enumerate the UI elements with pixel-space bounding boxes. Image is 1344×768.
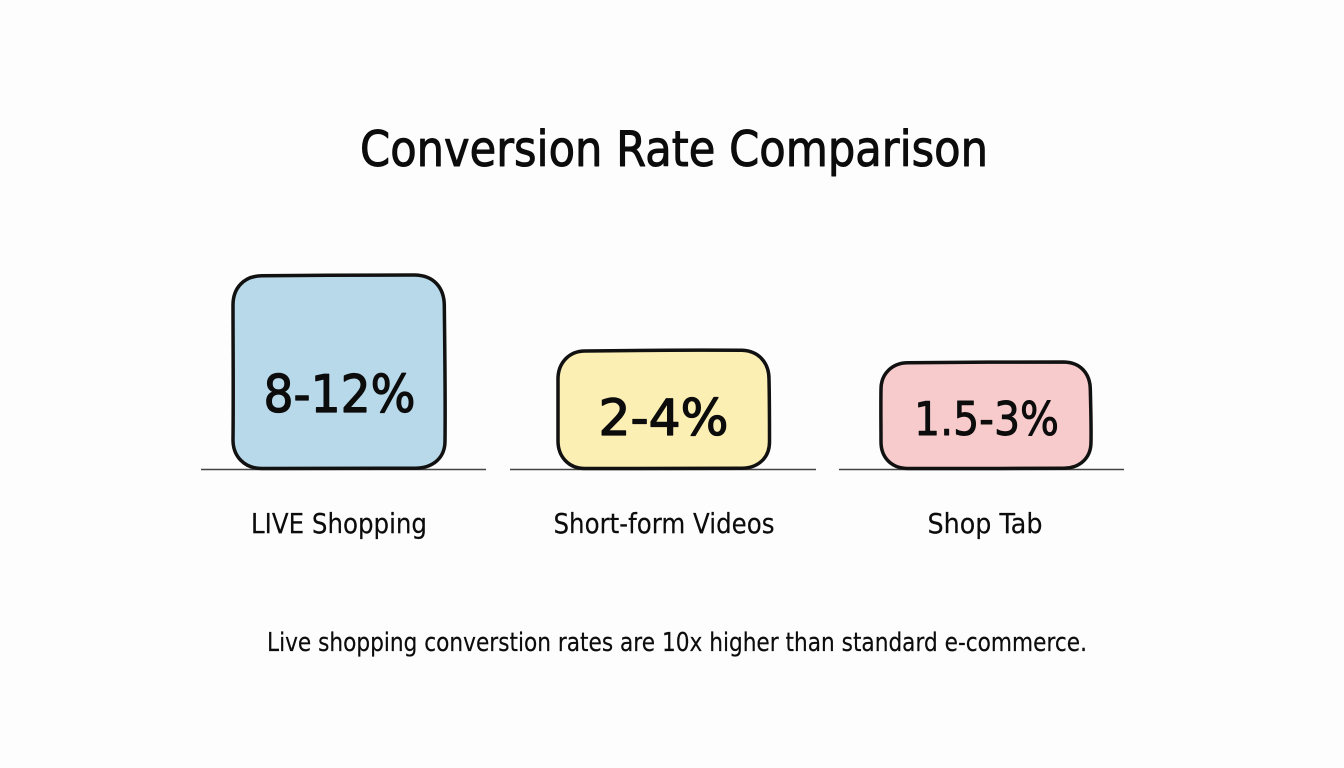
label: LIVE Shopping: LIVE Shopping: [251, 507, 427, 540]
bar group: LIVE Shopping: [201, 275, 486, 540]
bar: Short-form Videos: [558, 350, 770, 468]
label: Short-form Videos: Short-form Videos: [554, 507, 774, 540]
bar group: Short-form Videos: [510, 350, 816, 540]
bar: LIVE Shopping: [233, 275, 445, 468]
label: Shop Tab: Shop Tab: [928, 507, 1042, 540]
bar group: Shop Tab: [839, 362, 1124, 540]
value: 8-12%: 8-12%: [264, 365, 416, 425]
footnote: Live shopping converstion rates are 10x higher than standard e-commerce.: [267, 628, 1087, 658]
value: 2-4%: 2-4%: [598, 389, 728, 447]
bar: Shop Tab: [881, 362, 1091, 468]
title: Conversion Rate Comparison: [360, 121, 988, 178]
value: 1.5-3%: 1.5-3%: [914, 392, 1059, 446]
